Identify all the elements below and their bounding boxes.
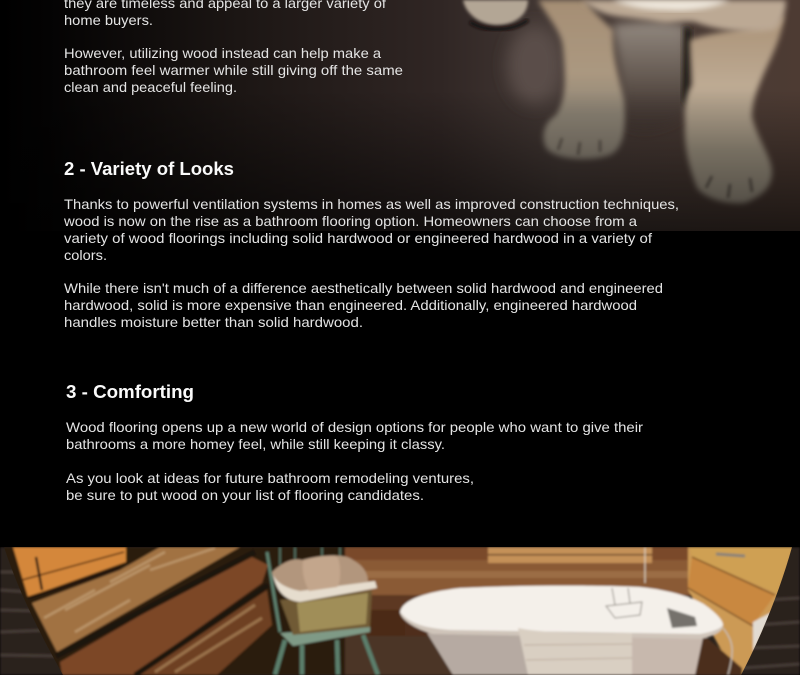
pipe <box>723 628 732 675</box>
light wood right wall <box>688 547 800 675</box>
section 3 text: be sure to put wood on your list of flooring candidates. <box>66 487 424 503</box>
section 1 text: However, utilizing wood instead can help make a <box>64 45 381 61</box>
chain <box>644 547 646 583</box>
floor under tub <box>695 636 742 675</box>
section 3 text: bathrooms a more homey feel, while still keeping it classy. <box>66 436 445 452</box>
section 2 text: colors. <box>64 247 107 263</box>
section 2 text: wood is now on the rise as a bathroom flooring option. Homeowners can choose from a <box>63 213 637 229</box>
section 1 text <box>64 0 403 95</box>
section 2 text: hardwood, solid is more expensive than engineered. Additionally, engineered hardwood <box>64 297 637 313</box>
section 1 text: home buyers. <box>64 12 153 28</box>
towel <box>518 628 632 675</box>
window shade <box>488 547 652 563</box>
photo: log cabin bathroom with clawfoot tub <box>0 547 800 675</box>
section 2 text <box>63 196 679 330</box>
bathtub <box>400 586 723 675</box>
dark wood floor behind round photo <box>0 547 800 675</box>
black band under dog photo <box>0 231 800 547</box>
heading: 2 - Variety of Looks: 2 - Variety of Looks <box>64 159 234 179</box>
heading: 3 - Comforting: 3 - Comforting <box>66 382 194 402</box>
section 2 text: While there isn't much of a difference aesthetically between solid hardwood and engineered <box>64 280 663 296</box>
section 2 text: variety of wood floorings including solid hardwood or engineered hardwood in a variety of <box>64 230 652 246</box>
orange shutter <box>13 547 126 598</box>
dog legs and paws <box>463 0 786 203</box>
section 2 text: handles moisture better than solid hardwood. <box>64 314 363 330</box>
section 3 text: Wood flooring opens up a new world of design options for people who want to give their <box>66 419 643 435</box>
section 3 text: As you look at ideas for future bathroom remodeling ventures, <box>66 470 474 486</box>
back log wall <box>345 547 690 675</box>
section 1 text: bathroom feel warmer while still giving off the same <box>64 62 403 78</box>
photo: dog on wood floor <box>80 0 800 231</box>
chair with basket <box>267 547 378 675</box>
round photo contents <box>0 547 800 675</box>
section 2 text: Thanks to powerful ventilation systems in homes as well as improved construction techniques, <box>64 196 679 212</box>
section 1 text: clean and peaceful feeling. <box>64 79 237 95</box>
section 3 text <box>66 419 643 503</box>
log wall left <box>4 547 346 675</box>
